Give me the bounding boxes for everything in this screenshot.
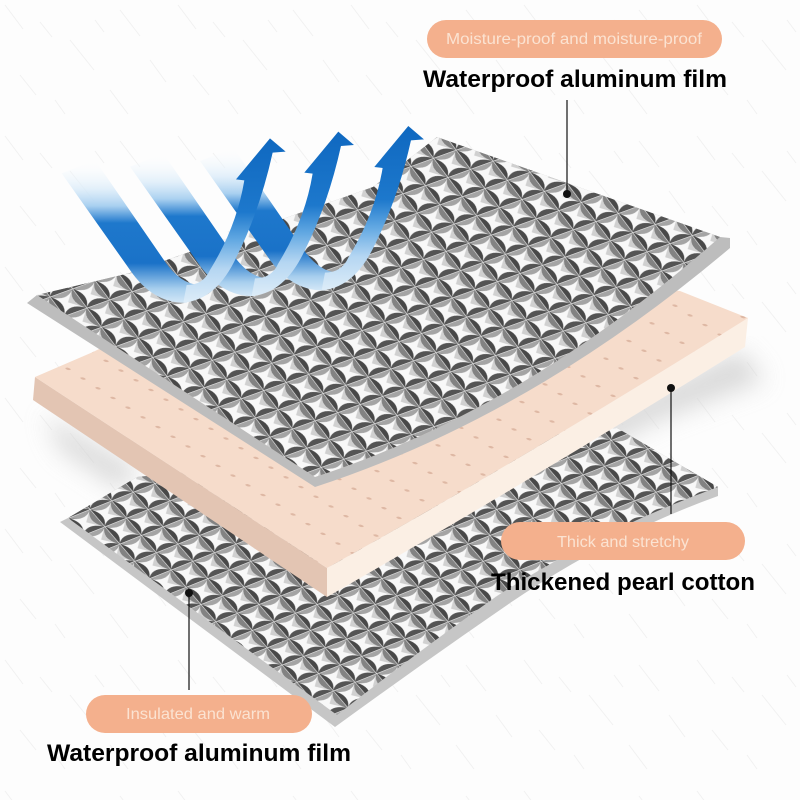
callout: top film bbox=[423, 20, 727, 198]
icon: blue airflow arrows bbox=[62, 126, 424, 303]
pill text: thick and stretchy: Thick and stretchy bbox=[557, 534, 689, 551]
shadow under pearl cotton bbox=[45, 350, 765, 490]
top face with pores bbox=[35, 250, 748, 568]
callout: pearl cotton bbox=[491, 384, 755, 596]
leader line: pearl cotton bbox=[667, 384, 675, 514]
callout: lower film bbox=[47, 589, 351, 767]
panel: lower aluminum film bbox=[60, 428, 718, 727]
leader line: lower film bbox=[185, 589, 193, 690]
right side face bbox=[327, 318, 748, 597]
pill: thick and stretchy bbox=[501, 522, 745, 560]
heading: lower film: Waterproof aluminum film bbox=[47, 740, 351, 767]
pill text: insulated and warm: Insulated and warm bbox=[126, 706, 270, 723]
pill: moisture-proof bbox=[427, 20, 722, 58]
left side face bbox=[33, 377, 327, 597]
heading: pearl cotton: Thickened pearl cotton bbox=[491, 569, 755, 596]
panel: top aluminum film bbox=[27, 137, 730, 487]
leader line: top film bbox=[563, 100, 571, 198]
pill text: moisture-proof: Moisture-proof and moisture-proof bbox=[446, 31, 703, 48]
panel: pearl cotton layer bbox=[33, 250, 748, 597]
heading: top film: Waterproof aluminum film bbox=[423, 66, 727, 93]
pill: insulated and warm bbox=[86, 695, 312, 733]
